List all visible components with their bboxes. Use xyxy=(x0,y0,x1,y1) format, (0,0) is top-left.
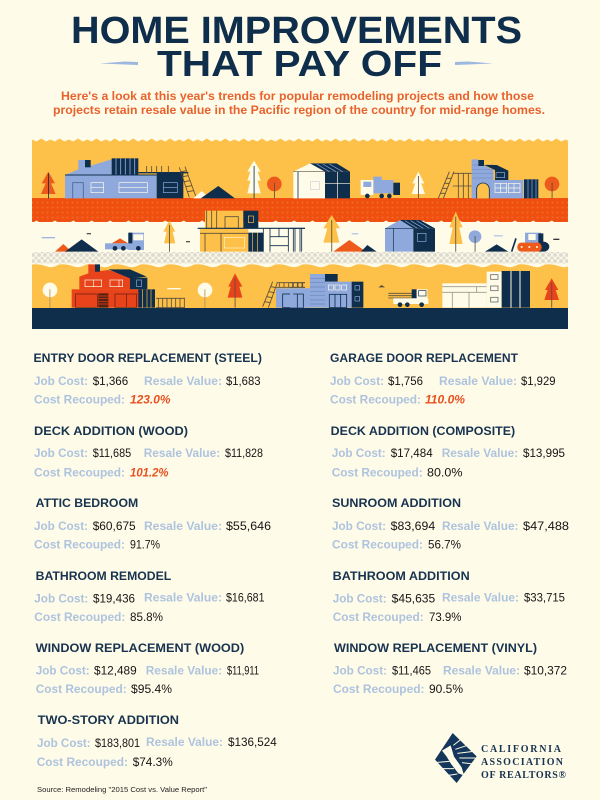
logo: California Association of Realtors: OF REALTORS® xyxy=(481,770,567,781)
deck addition wood xyxy=(34,426,263,480)
bathroom remodel: Job Cost: xyxy=(34,592,88,606)
bathroom remodel: Cost Recouped: xyxy=(34,610,125,624)
deck addition wood: $11,828 xyxy=(225,446,263,460)
entry door replacement: $1,366 xyxy=(93,374,129,388)
window replacement wood: Job Cost: xyxy=(36,664,90,678)
entry door replacement xyxy=(34,353,262,406)
deck addition composite: DECK ADDITION (COMPOSITE) xyxy=(331,426,515,438)
bathroom remodel: Resale Value: xyxy=(144,591,222,605)
illustration: neighborhood scene xyxy=(32,137,568,329)
window replacement vinyl: Cost Recouped: xyxy=(333,682,424,696)
title: HOME IMPROVEMENTS xyxy=(71,10,522,52)
row 3 left xyxy=(43,283,57,297)
deck addition wood: $11,685 xyxy=(93,446,131,460)
entry door replacement: Cost Recouped: xyxy=(34,392,125,406)
two-story addition: $136,524 xyxy=(228,735,277,749)
bathroom remodel: 85.8% xyxy=(130,610,163,624)
window replacement wood: Cost Recouped: xyxy=(36,682,127,696)
garage door replacement: $1,929 xyxy=(521,374,556,388)
deck addition wood: DECK ADDITION (WOOD) xyxy=(34,426,188,438)
sunroom addition: $83,694 xyxy=(391,519,436,533)
sunroom addition: Resale Value: xyxy=(442,519,518,533)
deck addition wood: Job Cost: xyxy=(34,446,88,460)
intro text: Here's a look at this year's trends for popular remodeling projects and how those xyxy=(61,91,534,103)
deck addition composite: $13,995 xyxy=(523,446,565,460)
sunroom addition: $47,488 xyxy=(523,519,569,533)
logo: California Association of Realtors: CALIFORNIA xyxy=(481,744,562,755)
window replacement wood: $12,489 xyxy=(94,664,137,678)
attic bedroom: Resale Value: xyxy=(144,519,222,533)
window replacement wood xyxy=(36,643,259,696)
bathroom remodel: BATHROOM REMODEL xyxy=(36,571,171,583)
deck addition composite: $17,484 xyxy=(391,446,433,460)
window replacement vinyl: Job Cost: xyxy=(333,664,387,678)
bathroom addition: BATHROOM ADDITION xyxy=(333,571,470,583)
garage door replacement: 110.0% xyxy=(425,392,465,406)
entry door replacement: Resale Value: xyxy=(144,374,222,388)
deck addition composite xyxy=(331,426,565,480)
window replacement wood: WINDOW REPLACEMENT (WOOD) xyxy=(36,643,244,655)
sunroom addition: SUNROOM ADDITION xyxy=(332,498,461,510)
window replacement wood: Resale Value: xyxy=(146,664,222,678)
intro text: projects retain resale value in the Pacific region of the country for mid-range homes. xyxy=(53,105,545,117)
window replacement vinyl: WINDOW REPLACEMENT (VINYL) xyxy=(334,643,537,655)
two-story addition xyxy=(37,715,277,769)
garage door replacement: $1,756 xyxy=(388,374,423,388)
entry door replacement: $1,683 xyxy=(226,374,261,388)
bathroom remodel: $19,436 xyxy=(93,592,135,606)
deck addition composite: Job Cost: xyxy=(332,446,386,460)
garage door replacement: GARAGE DOOR REPLACEMENT xyxy=(330,353,518,365)
title: THAT PAY OFF xyxy=(157,43,442,84)
garage door replacement: Resale Value: xyxy=(439,374,517,388)
logo: California Association of Realtors xyxy=(435,733,567,783)
attic bedroom: ATTIC BEDROOM xyxy=(36,498,138,510)
bathroom addition: Cost Recouped: xyxy=(333,610,424,624)
entry door replacement: 123.0% xyxy=(130,392,171,406)
bathroom addition: 73.9% xyxy=(429,610,462,624)
window replacement wood: $95.4% xyxy=(131,682,172,696)
left half buildings xyxy=(41,158,310,308)
sunroom addition: Job Cost: xyxy=(332,519,386,533)
bathroom remodel xyxy=(34,571,265,624)
bathroom addition: $45,635 xyxy=(392,592,436,606)
deck addition composite: 80.0% xyxy=(427,466,463,480)
bathroom addition xyxy=(333,571,565,624)
two-story addition: TWO-STORY ADDITION xyxy=(38,715,179,727)
two-story addition: $183,801 xyxy=(95,736,140,750)
deck addition wood: Resale Value: xyxy=(144,446,220,460)
garage door replacement: Job Cost: xyxy=(330,374,384,388)
intro text xyxy=(53,91,545,117)
bathroom addition: Resale Value: xyxy=(442,591,519,605)
two-story addition: $74.3% xyxy=(133,755,173,769)
title xyxy=(71,10,522,84)
attic bedroom xyxy=(34,498,271,552)
attic bedroom: $60,675 xyxy=(93,519,136,533)
bathroom addition: Job Cost: xyxy=(333,592,387,606)
deck addition wood: Cost Recouped: xyxy=(34,466,125,480)
deck addition composite: Resale Value: xyxy=(442,446,518,460)
logo: California Association of Realtors: ASSOCIATION xyxy=(481,757,564,768)
window replacement vinyl: $11,465 xyxy=(392,664,431,678)
title dash left xyxy=(100,62,138,65)
window replacement vinyl xyxy=(333,643,567,696)
window replacement vinyl: Resale Value: xyxy=(443,664,520,678)
window replacement wood: $11,911 xyxy=(227,664,259,678)
row 2 right xyxy=(290,228,305,252)
two-story addition: Cost Recouped: xyxy=(37,755,128,769)
sunroom addition xyxy=(332,498,569,552)
attic bedroom: 91.7% xyxy=(130,538,160,552)
sunroom addition: 56.7% xyxy=(428,538,461,552)
entry door replacement: ENTRY DOOR REPLACEMENT (STEEL) xyxy=(34,353,262,365)
garage door replacement xyxy=(330,353,556,406)
source note: Source: Remodeling "2015 Cost vs. Value Report" xyxy=(37,787,208,794)
title dash right xyxy=(455,62,493,65)
attic bedroom: $55,646 xyxy=(226,519,271,533)
row 2 left xyxy=(55,244,72,252)
window replacement vinyl: 90.5% xyxy=(429,682,463,696)
attic bedroom: Cost Recouped: xyxy=(34,538,125,552)
attic bedroom: Job Cost: xyxy=(34,519,88,533)
entry door replacement: Job Cost: xyxy=(34,374,88,388)
bathroom remodel: $16,681 xyxy=(226,591,265,605)
bathroom addition: $33,715 xyxy=(524,591,565,605)
garage door replacement: Cost Recouped: xyxy=(330,392,421,406)
deck addition composite: Cost Recouped: xyxy=(332,466,423,480)
right half buildings xyxy=(290,159,559,308)
window replacement vinyl: $10,372 xyxy=(524,664,567,678)
two-story addition: Job Cost: xyxy=(37,736,91,750)
two-story addition: Resale Value: xyxy=(146,735,223,749)
row 3 right xyxy=(290,283,305,287)
deck addition wood: 101.2% xyxy=(130,466,169,480)
sunroom addition: Cost Recouped: xyxy=(332,538,423,552)
